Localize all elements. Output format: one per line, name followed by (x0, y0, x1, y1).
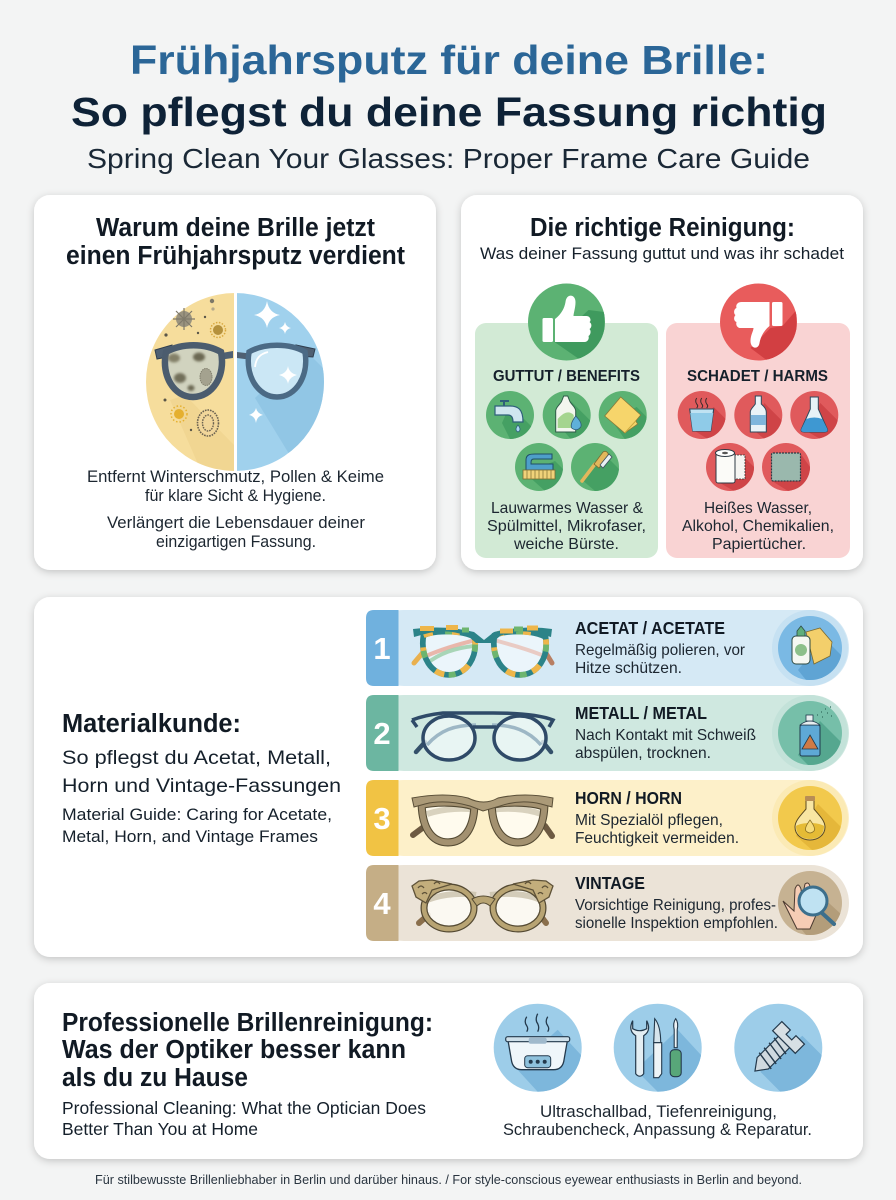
panel: proper cleaning (461, 195, 863, 570)
left dirty lens (155, 345, 233, 397)
text: acetate: Hitze schützen. (575, 660, 682, 677)
icon: scrubbing brush (515, 443, 563, 491)
text: materials subtitle: So pflegst du Acetat, Metall, (62, 747, 331, 769)
heading: why (66, 214, 405, 270)
heading: professional: Was der Optiker besser kann (62, 1036, 406, 1064)
panel: harms (666, 284, 850, 558)
text: professional english (62, 1098, 426, 1139)
heading: cleaning: Die richtige Reinigung: (530, 214, 795, 242)
icon: oil bottle (772, 780, 848, 856)
text: professional english: Professional Cleaning: What the Optician Does (62, 1098, 426, 1118)
row: vintage (366, 865, 849, 941)
panel: professional cleaning (34, 983, 863, 1159)
title: Frühjahrsputz für deine Brille: (130, 37, 768, 83)
text: horn: HORN / HORN (575, 788, 682, 808)
text: materials english: Metal, Horn, and Vintage Frames (62, 827, 318, 846)
heading: why: einen Frühjahrsputz verdient (66, 242, 405, 270)
icon: acetate glasses (413, 628, 552, 675)
subtitle: Spring Clean Your Glasses: Proper Frame Care Guide (87, 143, 810, 174)
number 2: 2 (373, 716, 391, 751)
sparkles (249, 301, 297, 423)
text: vintage: sionelle Inspektion empfohlen. (575, 915, 778, 932)
number 4: 4 (373, 886, 391, 921)
footer: Für stilbewusste Brillenliebhaber in Berlin und darüber hinaus. / For style-conscious eyewear enthusiasts in Berlin and beyond. (95, 1173, 802, 1187)
text: vintage: Vorsichtige Reinigung, profes- (575, 897, 776, 914)
text: why body: einzigartigen Fassung. (156, 532, 316, 551)
text: horn (575, 788, 739, 847)
text: vintage: VINTAGE (575, 873, 645, 893)
text: metal (575, 703, 756, 762)
icon: paper towels (706, 443, 754, 491)
text: harms: Papiertücher. (712, 536, 806, 553)
text: professional services: Schraubencheck, Anpassung & Reparatur. (503, 1120, 812, 1139)
icon: hand and magnifier (778, 871, 842, 935)
text: benefits: Lauwarmes Wasser & (491, 500, 643, 517)
heading: professional: als du zu Hause (62, 1064, 248, 1092)
icon: cleaner bottle and cloth (772, 610, 848, 686)
text: vintage (575, 873, 778, 932)
text: materials subtitle: Horn und Vintage-Fassungen (62, 775, 341, 797)
heading: materials: Materialkunde: (62, 710, 241, 738)
text: professional services: Ultraschallbad, Tiefenreinigung, (540, 1102, 777, 1121)
text: horn: Mit Spezialöl pflegen, (575, 812, 723, 829)
text: why body: Verlängert die Lebensdauer deiner (107, 513, 365, 532)
icon: hot water glass (678, 391, 726, 439)
text: materials english: Material Guide: Caring for Acetate, (62, 805, 332, 824)
label: harms: SCHADET / HARMS (687, 368, 828, 385)
text: metal: Nach Kontakt mit Schweiß (575, 727, 756, 744)
text: materials english (62, 805, 332, 846)
text: professional services (503, 1102, 812, 1139)
text: why body (87, 467, 384, 551)
label: benefits: GUTTUT / BENEFITS (493, 368, 640, 385)
icon: rough cloth (762, 443, 810, 491)
text: horn: Feuchtigkeit vermeiden. (575, 830, 739, 847)
text: harms (682, 500, 834, 553)
icon: horn glasses (412, 795, 553, 842)
text: acetate (575, 618, 746, 677)
text: why body: für klare Sicht & Hygiene. (145, 486, 326, 505)
text: metal: abspülen, trocknen. (575, 745, 711, 762)
icon: tools (614, 1004, 702, 1092)
heading: professional (62, 1009, 433, 1092)
text: harms: Alkohol, Chemikalien, (682, 518, 834, 535)
number 1: 1 (373, 631, 391, 666)
right clean lens (237, 345, 315, 397)
text: benefits: weiche Bürste. (513, 536, 619, 553)
icon: screw (734, 1004, 822, 1092)
icon: microfiber cloth (599, 391, 647, 439)
row: horn (366, 780, 849, 856)
title: So pflegst du deine Fassung richtig (71, 89, 827, 135)
title (71, 37, 827, 135)
icon: ultrasonic bath (494, 1004, 582, 1092)
text: materials subtitle (62, 747, 341, 797)
icon: chemical flask (790, 391, 838, 439)
text: acetate: ACETAT / ACETATE (575, 618, 725, 638)
panel: benefits (475, 284, 658, 558)
text: benefits (487, 500, 646, 553)
icon: soft brush (571, 443, 619, 491)
text: benefits: Spülmittel, Mikrofaser, (487, 518, 646, 535)
icon: tap (486, 391, 534, 439)
icon: dish soap with drop (543, 391, 591, 439)
icon: vintage glasses (412, 880, 553, 929)
row: acetate (366, 610, 849, 686)
icon: thumbs down (720, 284, 797, 360)
heading: why: Warum deine Brille jetzt (96, 214, 375, 242)
panel: materials (34, 597, 863, 957)
panel: why spring clean (34, 195, 436, 570)
subheading: cleaning: Was deiner Fassung guttut und was ihr schadet (480, 244, 844, 263)
row: metal (366, 695, 849, 771)
heading: professional: Professionelle Brillenreinigung: (62, 1009, 433, 1037)
icon: thumbs up (528, 284, 605, 360)
icon: metal glasses (412, 713, 553, 760)
text: acetate: Regelmäßig polieren, vor (575, 642, 746, 659)
text: metal: METALL / METAL (575, 703, 707, 723)
icon: dirty and clean glasses circle (146, 293, 324, 471)
text: professional english: Better Than You at Home (62, 1119, 258, 1139)
icon: spray can (772, 695, 848, 771)
text: harms: Heißes Wasser, (704, 500, 812, 517)
text: why body: Entfernt Winterschmutz, Pollen & Keime (87, 467, 384, 486)
icon: alcohol bottle (734, 391, 782, 439)
number 3: 3 (373, 801, 391, 836)
